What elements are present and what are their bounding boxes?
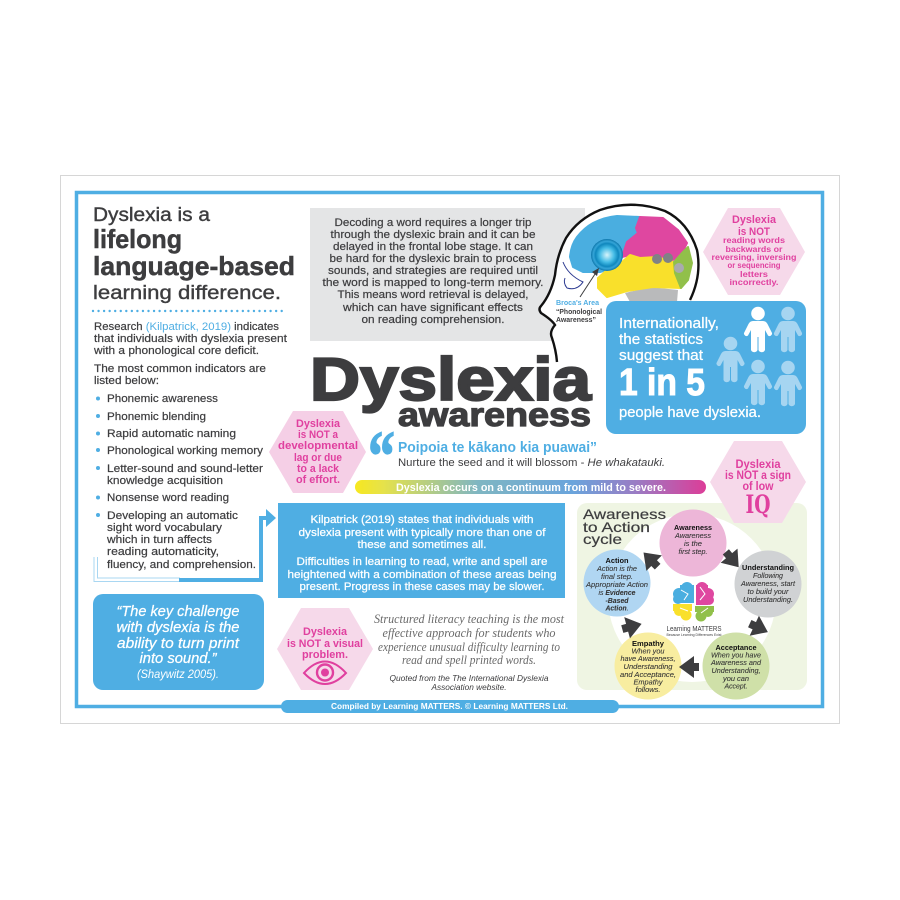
step: Awareness: Awareness [674, 525, 712, 532]
panel: decoding a word: be hard for the dyslexic brain to process [330, 253, 537, 265]
step: Acceptance: you can [722, 676, 749, 683]
step: Understanding: Following [753, 573, 783, 580]
panel: 1 in 5 statistic: Internationally, [619, 316, 719, 332]
panel: decoding a word: sounds, and strategies are required until [328, 265, 538, 277]
icon: eye [304, 662, 346, 684]
text block: structured literacy: Quoted from the The International Dyslexia [390, 674, 549, 683]
head and brain illustration [540, 205, 698, 362]
step: Acceptance: Acceptance [716, 645, 757, 652]
hexagon: not reading backwards [703, 208, 805, 295]
quote panel: key challenge [93, 594, 264, 690]
panel: 1 in 5 statistic: suggest that [619, 348, 703, 364]
quote panel: key challenge: with dyslexia is the [116, 620, 240, 636]
step: Awareness [660, 510, 726, 576]
head and brain illustration: “Phonological [556, 307, 602, 316]
cycle title [583, 506, 666, 547]
hexagon: not a sign of low IQ: IQ [746, 490, 770, 519]
text block: structured literacy: Structured literacy teaching is the most [374, 611, 564, 626]
step: Action: final step. [601, 574, 633, 581]
step: Empathy: and Acceptance, [620, 672, 676, 679]
list: indicators: Rapid automatic naming [107, 428, 236, 440]
step: Understanding: Awareness, start [740, 581, 796, 588]
panel: Kilpatrick statement: present. Progress in these cases may be slower. [300, 581, 544, 593]
list: indicators: sight word vocabulary [107, 522, 223, 534]
text block: research intro [93, 321, 287, 387]
step: Acceptance [702, 632, 770, 700]
hexagon: not reading backwards: is NOT [738, 226, 770, 238]
step: Acceptance: Understanding, [712, 668, 761, 675]
step: Empathy: follows. [636, 687, 661, 694]
list: indicators: which in turn affects [106, 534, 213, 546]
hexagon: not a visual problem [277, 608, 373, 690]
footer bar: Compiled by Learning MATTERS. © Learning MATTERS Ltd. [331, 701, 568, 711]
step: Empathy: When you [632, 648, 665, 656]
panel: decoding a word: on reading comprehension. [362, 314, 504, 326]
heading: lifelong language-based: learning difference. [93, 282, 281, 304]
list: indicators: Letter-sound and sound-letter [107, 463, 263, 475]
panel: Kilpatrick statement: dyslexia present with typically more than one of [298, 527, 547, 539]
hexagon: not reading backwards: reversing, inversing [712, 252, 796, 262]
quote panel: key challenge: “The key challenge [116, 604, 240, 620]
proverb quote: “ [368, 416, 395, 496]
quote panel: key challenge: into sound.” [140, 651, 218, 667]
heading: lifelong language-based: Dyslexia is a [93, 205, 210, 226]
step: Action: Action. [605, 606, 629, 612]
text block: research intro: with a phonological core deficit. [93, 345, 259, 357]
step: Understanding: to build your [748, 589, 789, 596]
panel: decoding a word: the word is mapped to long-term memory. [322, 277, 544, 289]
step: Empathy: Understanding [624, 664, 673, 671]
list: indicators: Nonsense word reading [107, 492, 229, 504]
panel: decoding a word: This means word retrieval is delayed, [338, 289, 528, 301]
heading: lifelong language-based: language-based [93, 251, 295, 281]
hexagon: not reading backwards: or sequencing [728, 260, 780, 270]
panel: 1 in 5 statistic: people have dyslexia. [619, 405, 761, 421]
hexagon: not a developmental lag: lag or due [294, 452, 342, 464]
text block: structured literacy: read and spell printed words. [402, 652, 536, 667]
hexagon: not reading backwards: incorrectly. [730, 277, 778, 287]
step: Action [584, 550, 650, 616]
list: indicators: Phonemic blending [107, 411, 206, 423]
panel: 1 in 5 statistic: 1 in 5 [619, 362, 705, 404]
hexagon: not a sign of low IQ: Dyslexia [736, 459, 781, 471]
step: Acceptance: When you have [711, 652, 761, 660]
proverb quote: Nurture the seed and it will blossom - He whakatauki. [398, 457, 665, 469]
hexagon: not a visual problem: problem. [302, 649, 348, 661]
hexagon: not reading backwards: reading words [723, 235, 785, 245]
main title: Dyslexia [310, 346, 592, 413]
hexagon: not a visual problem: is NOT a visual [287, 638, 363, 650]
panel: Awareness to Action cycle [577, 503, 807, 700]
panel: decoding a word: Decoding a word requires a longer trip [334, 217, 532, 229]
hexagon: not reading backwards: backwards or [726, 244, 783, 254]
step: Acceptance: Accept. [724, 684, 748, 690]
step: Action: -Based [606, 598, 629, 605]
cycle title: cycle [583, 531, 622, 547]
step: Empathy [614, 632, 682, 700]
footer bar [281, 700, 619, 713]
panel: Kilpatrick statement: heightened with a combination of these areas being [288, 569, 556, 581]
main title: awareness [398, 396, 591, 433]
hexagon: not a developmental lag: developmental [278, 440, 358, 452]
step: Empathy: Empathy [632, 641, 664, 648]
main title [310, 346, 592, 433]
blue frame [76, 192, 822, 706]
text block: structured literacy [374, 611, 564, 692]
text block: research intro: listed below: [94, 375, 159, 387]
Learning MATTERS logo: Because Learning Differences Exist [666, 633, 722, 637]
panel: 1 in 5 statistic [606, 301, 806, 434]
heading: lifelong language-based: lifelong [93, 224, 182, 254]
text block: research intro: The most common indicators are [94, 363, 266, 375]
cycle arrows [619, 545, 773, 678]
list: indicators: reading automaticity, [107, 546, 219, 558]
step: Awareness: first step. [678, 549, 708, 556]
step: Awareness: Awareness [674, 533, 712, 540]
quote panel: key challenge: (Shaywitz 2005). [137, 669, 219, 681]
hexagon: not a developmental lag: to a lack [297, 463, 340, 475]
panel: Kilpatrick statement: Difficulties in learning to read, write and spell are [296, 556, 548, 568]
panel: Kilpatrick statement [278, 503, 565, 598]
hexagon: not a sign of low IQ: is NOT a sign [725, 470, 791, 482]
hexagon: not reading backwards: letters [740, 269, 768, 279]
step: Understanding: Understanding [742, 565, 794, 572]
proverb quote [368, 416, 665, 496]
hexagon: not a sign of low IQ [710, 441, 806, 523]
list: indicators: knowledge acquisition [107, 475, 223, 487]
proverb quote: Poipoia te kākano kia puawai” [398, 440, 597, 456]
text block: structured literacy: experience unusual difficulty learning to [378, 639, 560, 654]
hexagon: not a developmental lag: is NOT a [298, 429, 339, 441]
panel: 1 in 5 statistic: the statistics [619, 332, 703, 348]
hexagon: not a sign of low IQ: of low [742, 481, 774, 493]
step: Action: Appropriate Action [585, 582, 648, 589]
arrow: list to Kilpatrick panel [94, 509, 276, 582]
list: indicators: fluency, and comprehension. [107, 559, 256, 571]
list: indicators: Phonemic awareness [107, 393, 219, 405]
text block: structured literacy: Association website. [430, 683, 506, 692]
poster card [60, 176, 840, 724]
step: Understanding [734, 550, 802, 618]
panel: decoding a word: delayed in the frontal lobe stage. It can [333, 241, 533, 253]
step: Action: Action [606, 558, 628, 565]
head and brain illustration: Awareness” [556, 315, 596, 324]
continuum bar [355, 480, 706, 494]
list: indicators [96, 393, 264, 571]
continuum bar: Dyslexia occurs on a continuum from mild to severe. [396, 482, 666, 494]
list: indicators: Phonological working memory [107, 445, 264, 457]
text block: structured literacy: effective approach for students who [382, 625, 556, 640]
hexagon: not reading backwards: Dyslexia [732, 214, 777, 226]
step: Action: Action is the [596, 566, 637, 573]
panel: decoding a word: which can have significant effects [342, 302, 524, 314]
panel: decoding a word: through the dyslexic brain and it can be [330, 229, 536, 241]
panel: decoding a word [310, 208, 585, 341]
text block: research intro: that individuals with dyslexia present [94, 333, 287, 345]
heading: lifelong language-based [93, 205, 295, 304]
panel: Kilpatrick statement: Kilpatrick (2019) states that individuals with [310, 514, 534, 526]
cycle title: Awareness [583, 506, 666, 522]
head and brain illustration: Broca's Area [556, 298, 600, 307]
text block: research intro: Research (Kilpatrick, 2019) indicates [94, 321, 280, 333]
step: Understanding: Understanding. [743, 597, 793, 604]
dotted divider [93, 310, 282, 312]
panel: Kilpatrick statement: these and sometimes all. [358, 539, 486, 551]
Learning MATTERS logo [666, 582, 722, 637]
quote panel: key challenge: ability to turn print [117, 636, 240, 652]
hexagon: not a developmental lag: of effort. [296, 474, 340, 486]
list: indicators: Developing an automatic [107, 510, 239, 522]
step: Empathy: Empathy [634, 680, 663, 686]
Learning MATTERS logo: Learning MATTERS [666, 624, 722, 633]
cycle title: to Action [583, 519, 650, 535]
hexagon: not a visual problem: Dyslexia [303, 626, 348, 638]
step: Action: is Evidence [598, 590, 636, 597]
hexagon: not a developmental lag [269, 411, 366, 493]
step: Awareness: is the [684, 541, 702, 548]
step: Empathy: have Awareness, [620, 656, 676, 663]
hexagon: not a developmental lag: Dyslexia [296, 418, 341, 430]
step: Acceptance: Awareness and [710, 660, 762, 667]
